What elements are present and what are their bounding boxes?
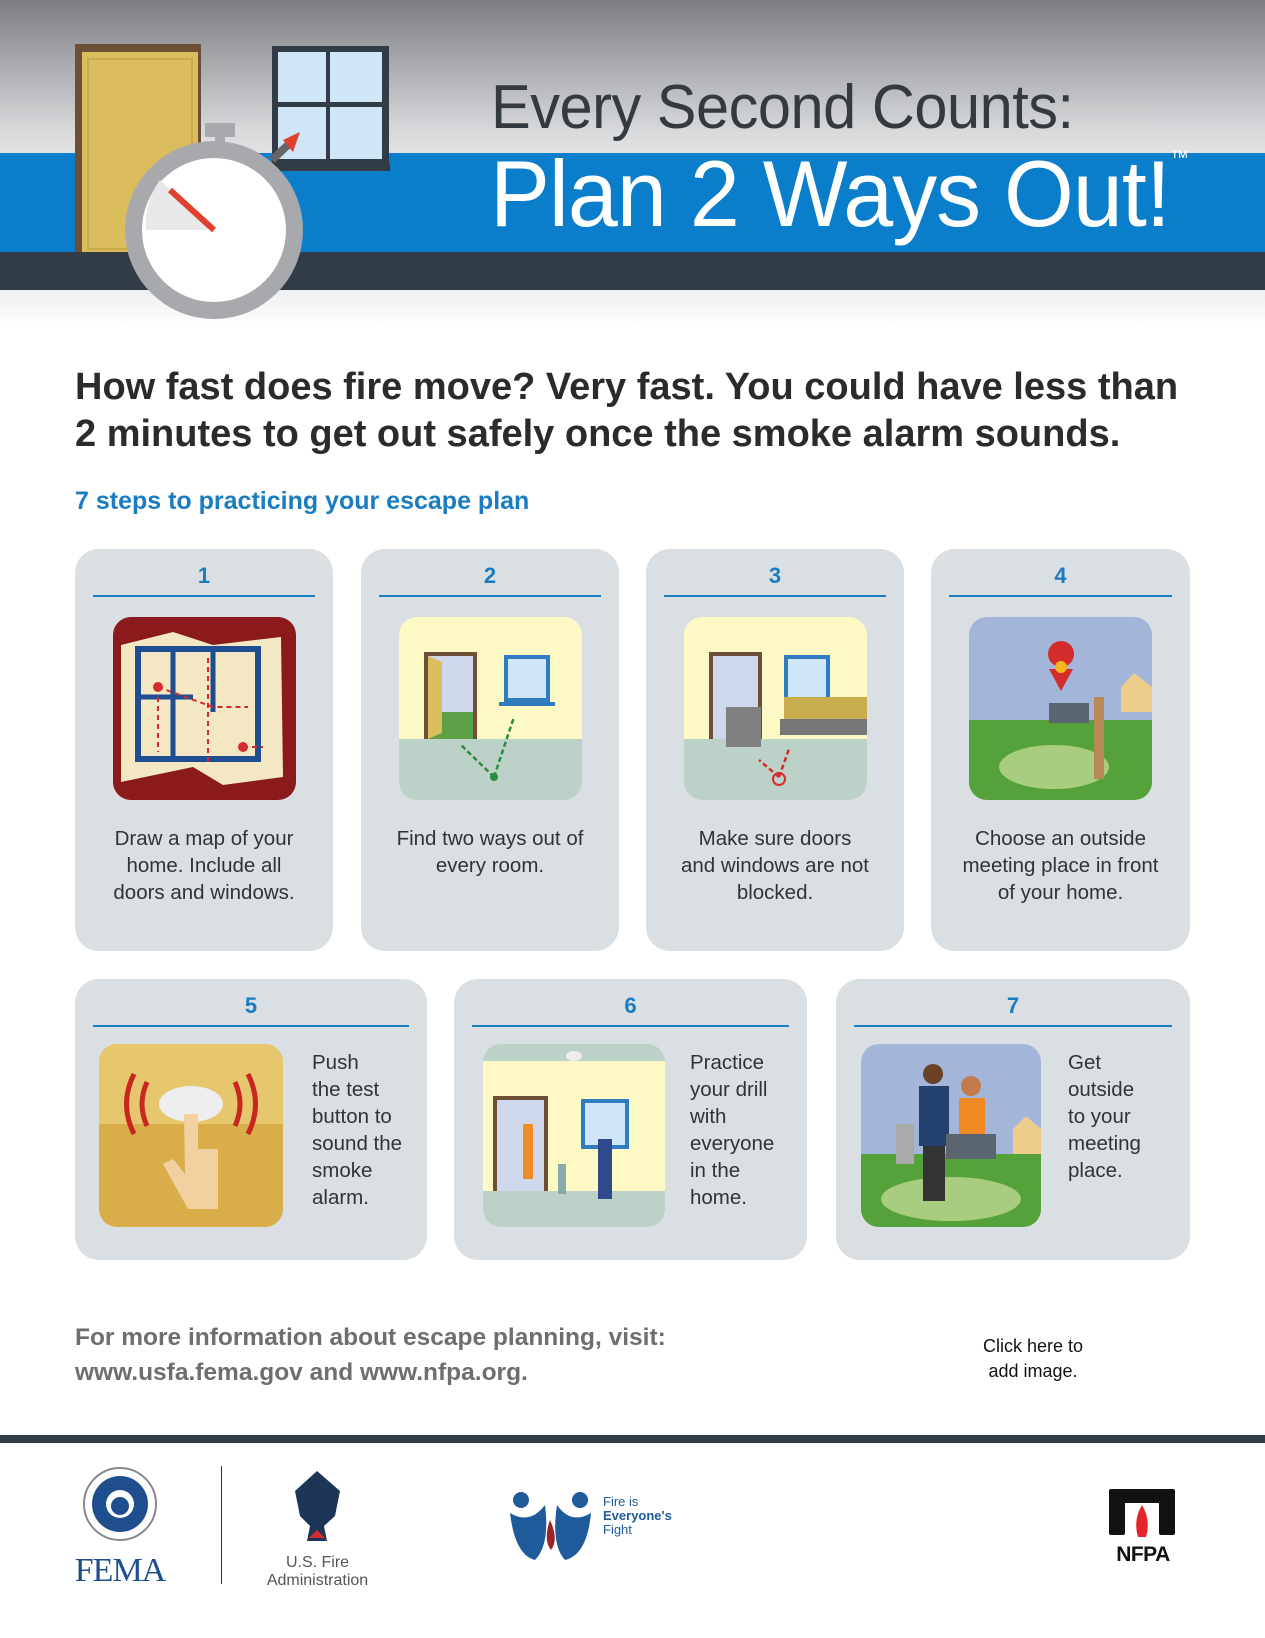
card 5: alarm. bbox=[312, 1186, 369, 1209]
card 5: sound the bbox=[312, 1132, 402, 1155]
card 1: Draw a map of your bbox=[115, 827, 293, 850]
footer info text bbox=[75, 1324, 666, 1386]
headline: 2 minutes to get out safely once the smoke alarm sounds. bbox=[75, 413, 1120, 455]
card 1: 1 bbox=[198, 563, 210, 588]
card 5: Push bbox=[312, 1051, 359, 1074]
card 3: and windows are not bbox=[681, 854, 869, 877]
footer info text: For more information about escape planning, visit: bbox=[75, 1324, 666, 1351]
title: Every Second Counts: bbox=[491, 73, 1074, 142]
card 6: in the bbox=[690, 1159, 740, 1182]
image placeholder text: Click here to bbox=[983, 1336, 1083, 1356]
card 7: meeting bbox=[1068, 1132, 1141, 1155]
headline: How fast does fire move? Very fast. You could have less than bbox=[75, 366, 1178, 408]
logo: Fire is Everyone's Fight: Fire is bbox=[603, 1494, 638, 1509]
image placeholder text bbox=[983, 1336, 1083, 1381]
card 5: the test bbox=[312, 1078, 379, 1101]
header banner bbox=[0, 0, 1265, 319]
logo: NFPA bbox=[1109, 1489, 1175, 1566]
card 2: 2 bbox=[484, 563, 496, 588]
card 2 bbox=[361, 549, 619, 951]
title: Plan 2 Ways Out: Plan 2 Ways Out!™ bbox=[490, 141, 1188, 246]
card 4: 4 bbox=[1054, 563, 1067, 588]
card 3: Make sure doors bbox=[699, 827, 851, 850]
card 7: place. bbox=[1068, 1159, 1123, 1182]
icon: room with exits bbox=[399, 617, 582, 800]
card 6: everyone bbox=[690, 1132, 774, 1155]
image placeholder text: add image. bbox=[988, 1361, 1078, 1381]
logo: Fire is Everyone's Fight: Everyone's bbox=[603, 1508, 672, 1523]
footer info text: www.usfa.fema.gov and www.nfpa.org. bbox=[75, 1359, 528, 1386]
card 4: of your home. bbox=[998, 881, 1123, 904]
card 3: 3 bbox=[769, 563, 781, 588]
card 6: home. bbox=[690, 1186, 747, 1209]
card 5: 5 bbox=[245, 993, 257, 1018]
logo: NFPA: NFPA bbox=[1116, 1543, 1170, 1566]
card 7: to your bbox=[1068, 1105, 1131, 1128]
logo: U.S. Fire Administration: Administration bbox=[267, 1572, 368, 1589]
card 1: doors and windows. bbox=[113, 881, 295, 904]
logo: FEMA: FEMA bbox=[75, 1552, 165, 1589]
card 2: Find two ways out of bbox=[397, 827, 583, 850]
card 5 bbox=[75, 979, 427, 1260]
card 6: with bbox=[690, 1105, 726, 1128]
headline bbox=[75, 366, 1178, 455]
card 7 bbox=[836, 979, 1190, 1260]
card 3: blocked. bbox=[737, 881, 813, 904]
logo: FEMA bbox=[75, 1467, 166, 1589]
card 4: Choose an outside bbox=[975, 827, 1146, 850]
logo: U.S. Fire Administration bbox=[267, 1471, 368, 1589]
card 4: meeting place in front bbox=[962, 854, 1158, 877]
logo: Fire is Everyone's Fight bbox=[510, 1492, 672, 1560]
icon: family outside bbox=[861, 1044, 1041, 1227]
logo: U.S. Fire Administration: U.S. Fire bbox=[286, 1554, 349, 1571]
logo: Fire is Everyone's Fight: Fight bbox=[603, 1522, 632, 1537]
card 2: every room. bbox=[436, 854, 544, 877]
card 6: 6 bbox=[624, 993, 637, 1018]
card 5: smoke bbox=[312, 1159, 372, 1182]
icon: smoke alarm bbox=[99, 1044, 283, 1227]
card 5: button to bbox=[312, 1105, 392, 1128]
illustration: door, window, stopwatch bbox=[75, 44, 390, 319]
subheading: 7 steps to practicing your escape plan bbox=[75, 487, 529, 515]
card 6: your drill bbox=[690, 1078, 767, 1101]
card 3 bbox=[646, 549, 904, 951]
icon: family drill bbox=[483, 1044, 665, 1227]
icon: map bbox=[113, 617, 296, 800]
card 6: Practice bbox=[690, 1051, 764, 1074]
card 1: home. Include all bbox=[126, 854, 281, 877]
card 4 bbox=[931, 549, 1190, 951]
card 7: 7 bbox=[1007, 993, 1019, 1018]
card 6 bbox=[454, 979, 807, 1260]
card 7: Get bbox=[1068, 1051, 1101, 1074]
icon: meeting place bbox=[969, 617, 1152, 800]
card 1 bbox=[75, 549, 333, 951]
icon: blocked room bbox=[684, 617, 867, 800]
card 7: outside bbox=[1068, 1078, 1134, 1101]
